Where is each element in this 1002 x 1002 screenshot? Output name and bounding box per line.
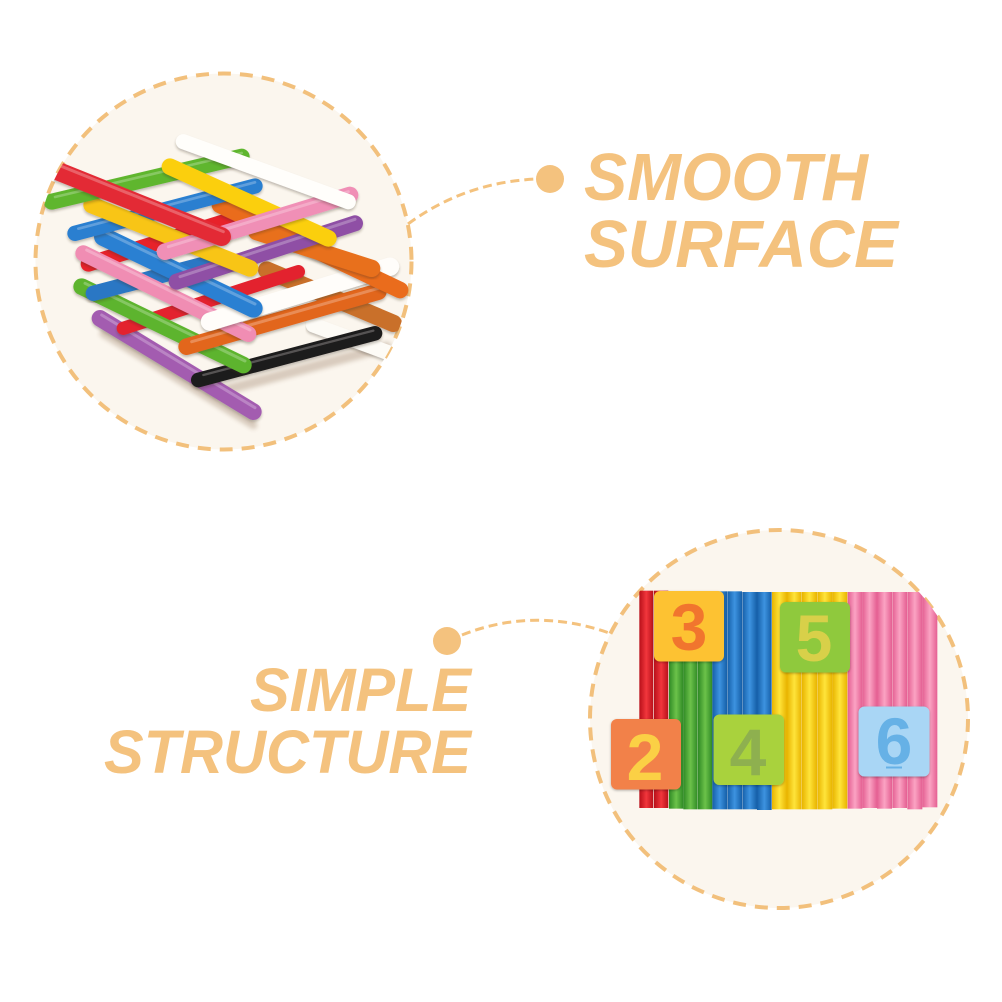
number card 5 <box>780 601 850 675</box>
rod: blue middle <box>103 233 255 308</box>
rod: blue upper <box>75 182 255 233</box>
blue sticks <box>712 591 772 810</box>
pink sticks <box>848 592 937 809</box>
photo circle: counting sticks and number cards <box>590 530 968 908</box>
rod: purple middle <box>177 219 355 282</box>
rod: orange right <box>220 205 400 290</box>
number card 5: 5 <box>796 601 832 675</box>
rod: orange lower <box>187 288 378 347</box>
heading: simple structure <box>104 656 473 787</box>
red sticks <box>639 591 668 808</box>
marker dot: simple structure <box>433 627 461 655</box>
heading: simple structure: STRUCTURE <box>104 718 473 787</box>
rod: red middle <box>88 220 230 264</box>
rod: brown back <box>267 270 393 323</box>
rod: yellow top <box>170 167 328 238</box>
number card 3 <box>654 590 724 664</box>
number card 2: 2 <box>627 720 663 794</box>
rod shadows <box>103 333 387 425</box>
yellow sticks <box>772 592 847 809</box>
number card 4: 4 <box>730 715 767 789</box>
rod: black <box>198 331 375 380</box>
heading: smooth surface: SMOOTH <box>584 140 870 215</box>
rod: red lower <box>123 272 298 328</box>
connector: smooth surface <box>408 179 537 224</box>
heading: simple structure: SIMPLE <box>250 656 473 725</box>
connector: simple structure <box>462 620 612 635</box>
rod: white bottom <box>313 325 390 353</box>
rod: yellow lower <box>92 205 250 268</box>
rod: red top <box>53 164 223 237</box>
rod: orange upper <box>257 232 372 268</box>
photo circle: colourful sticks stacked <box>36 74 412 450</box>
rod: pink top <box>165 192 350 252</box>
number card 2 <box>611 719 681 794</box>
heading: smooth surface <box>584 140 900 282</box>
rod: green lower <box>82 283 245 365</box>
marker dot: smooth surface <box>536 165 564 193</box>
rod: white top <box>183 142 348 202</box>
number card 4 <box>714 714 784 789</box>
green sticks <box>669 662 712 810</box>
rod: pink lower <box>83 250 250 334</box>
number card 6: 6 <box>876 704 912 778</box>
number card 6 <box>858 704 930 778</box>
number card 3: 3 <box>671 590 707 664</box>
rod: white middle <box>210 267 390 322</box>
rod: green top <box>52 153 242 202</box>
rod: purple bottom <box>100 315 255 412</box>
heading: smooth surface: SURFACE <box>584 207 900 282</box>
rod: blue lower <box>93 262 213 293</box>
